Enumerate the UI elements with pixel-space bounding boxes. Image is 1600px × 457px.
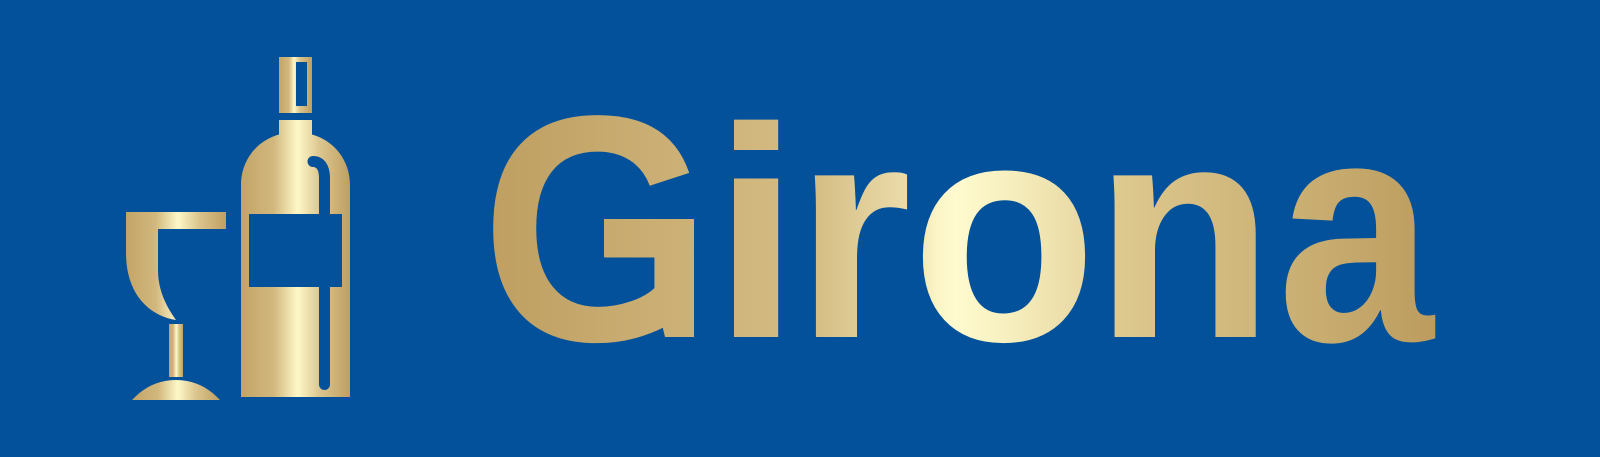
bottle body	[241, 120, 350, 397]
bottle highlight stripe	[313, 162, 324, 384]
title: G	[481, 50, 712, 409]
glass foot	[132, 380, 220, 400]
bottle cap	[279, 57, 312, 113]
title: r	[795, 60, 912, 402]
icon: wine glass	[126, 212, 226, 400]
title: o	[911, 55, 1097, 407]
glass bowl	[126, 212, 226, 320]
title: n	[1094, 60, 1274, 402]
title: G crossbar and spur detail	[604, 219, 694, 337]
title: a	[1278, 50, 1435, 408]
icon: wine bottle	[241, 57, 350, 397]
glass stem	[169, 324, 183, 377]
title: i	[712, 65, 801, 401]
bottle label	[249, 214, 342, 287]
